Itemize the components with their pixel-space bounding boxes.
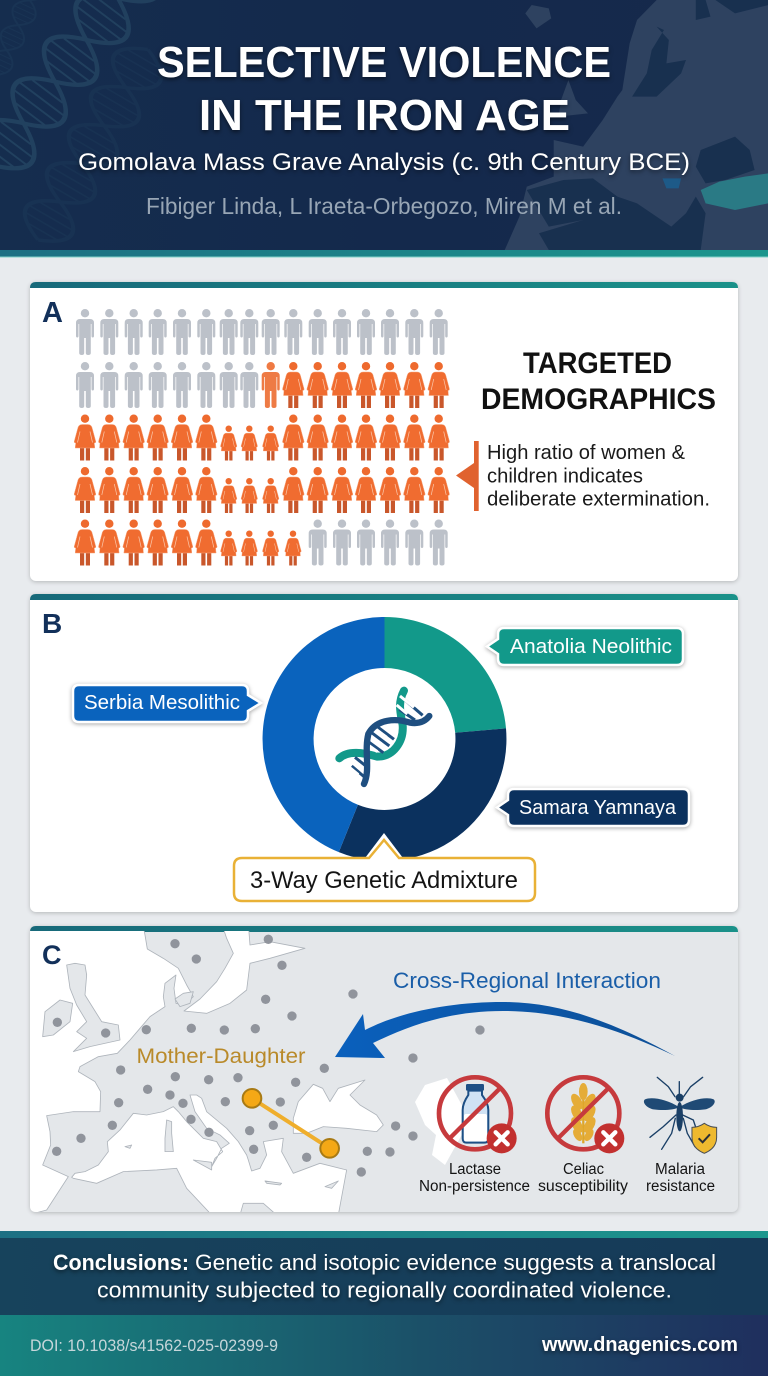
callout: 3-way genetic admixture: 3-Way Genetic Admixture (250, 867, 518, 894)
icon labels: Non-persistence (419, 1178, 530, 1195)
panel letter A: A (42, 297, 63, 329)
title: SELECTIVE VIOLENCE (157, 38, 611, 87)
label: Anatolia Neolithic (487, 628, 683, 665)
label: Samara Yamnaya: Samara Yamnaya (519, 796, 677, 819)
DOI: DOI: 10.1038/s41562-025-02399-9 (30, 1337, 278, 1355)
authors: Fibiger Linda, L Iraeta-Orbegozo, Miren M et al. (146, 193, 622, 219)
icon: DNA helix (339, 691, 429, 784)
map: white haze behind icons (415, 1078, 462, 1165)
icon labels: resistance (646, 1178, 715, 1195)
map: land and seas (28, 923, 470, 1215)
callout marker arrow (456, 441, 479, 511)
panel letter B: B (42, 608, 62, 639)
background: map of Europe (505, 0, 768, 250)
label: Anatolia Neolithic: Anatolia Neolithic (510, 635, 672, 658)
icon labels: Celiac (563, 1161, 604, 1178)
pictogram grid of people (74, 309, 450, 566)
map: sample site dots (52, 935, 485, 1177)
icon labels: Malaria (655, 1161, 705, 1178)
icon labels: Lactase (449, 1161, 501, 1178)
conclusions text (53, 1250, 716, 1302)
icon: malaria resistance (644, 1077, 717, 1153)
icon labels: susceptibility (538, 1178, 628, 1195)
panel C: map of Europe (28, 923, 738, 1215)
label: Serbia Mesolithic: Serbia Mesolithic (84, 691, 240, 714)
icon: lactase non-persistence (439, 1077, 517, 1153)
heading: targeted demographics: TARGETED (523, 347, 672, 380)
callout text: children indicates (487, 464, 643, 488)
callout: 3-way genetic admixture (234, 833, 535, 901)
website: www.dnagenics.com (541, 1334, 738, 1356)
heading: targeted demographics (481, 347, 716, 416)
background: DNA helices (0, 0, 156, 170)
panel A: targeted demographics (30, 282, 738, 581)
heading: targeted demographics: DEMOGRAPHICS (481, 383, 716, 416)
callout text: deliberate extermination. (487, 488, 710, 510)
conclusions text: Genetic and isotopic evidence suggests a translocal (195, 1250, 716, 1275)
label: Serbia Mesolithic (73, 685, 261, 722)
conclusions text: Conclusions: (53, 1250, 189, 1275)
label: Samara Yamnaya (497, 789, 689, 826)
label: Mother-Daughter: Mother-Daughter (136, 1045, 306, 1068)
footer (0, 1315, 768, 1376)
header (0, 0, 768, 258)
conclusions text: community subjected to regionally coordinated violence. (97, 1278, 672, 1302)
panel B: genetic admixture (30, 594, 738, 912)
title: IN THE IRON AGE (199, 91, 570, 140)
callout text (487, 441, 710, 510)
donut chart (263, 617, 506, 861)
callout text: High ratio of women & (487, 441, 685, 464)
subtitle: Gomolava Mass Grave Analysis (c. 9th Century BCE) (78, 149, 690, 176)
panel letter C: C (42, 940, 62, 970)
conclusions band (0, 1231, 768, 1315)
icon labels (419, 1161, 715, 1195)
title (157, 38, 611, 140)
mother-daughter link (243, 1089, 339, 1158)
icon: celiac susceptibility (547, 1077, 624, 1153)
label: cross-regional interaction: Cross-Regional Interaction (393, 968, 661, 993)
arrow: cross-regional (335, 1002, 675, 1058)
